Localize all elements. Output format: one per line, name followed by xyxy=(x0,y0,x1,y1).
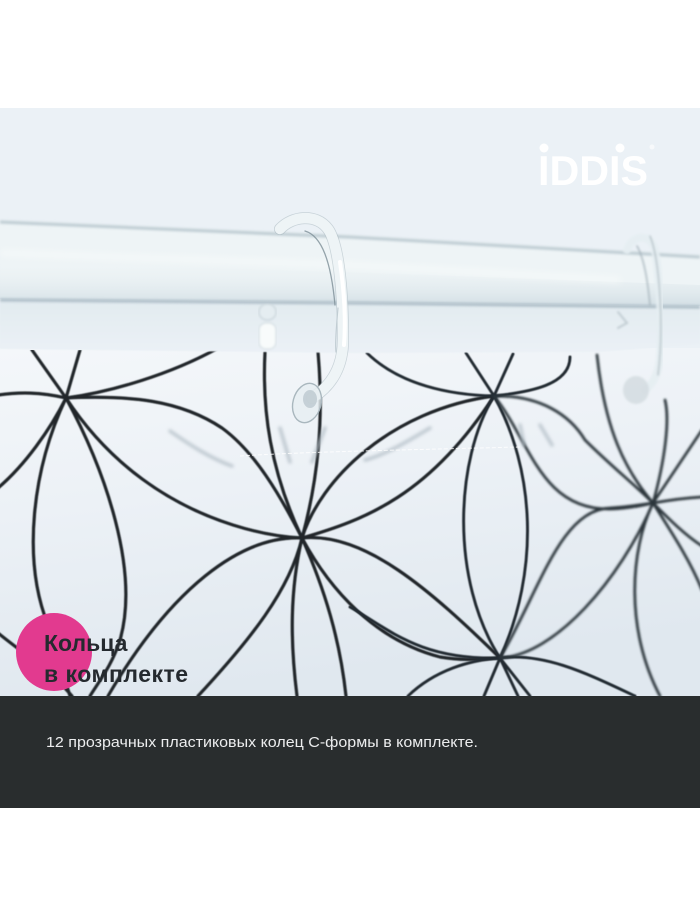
logo: IDDIS: IDDIS xyxy=(538,147,648,194)
heading: rings included: Кольца xyxy=(44,630,128,656)
ring 1: left clear C-ring xyxy=(280,218,345,426)
curtain fold creases xyxy=(170,425,552,466)
logo registered mark xyxy=(650,144,654,150)
curtain geometric pattern xyxy=(0,347,500,696)
ring drop highlight xyxy=(259,304,276,349)
curtain top seam xyxy=(240,447,520,456)
dark caption band xyxy=(0,696,700,808)
lower rod xyxy=(1,303,514,354)
wall background xyxy=(0,108,700,358)
photo: curtain rod and curtain xyxy=(0,108,700,696)
pink badge circle xyxy=(16,613,92,691)
curtain fabric xyxy=(0,348,700,696)
ring 2: right blurred C-ring xyxy=(618,236,661,404)
upper rod xyxy=(0,220,700,307)
heading: rings included: в комплекте xyxy=(44,661,189,687)
caption text: 12 прозрачных пластиковых колец С-формы в комплекте. xyxy=(46,734,478,751)
